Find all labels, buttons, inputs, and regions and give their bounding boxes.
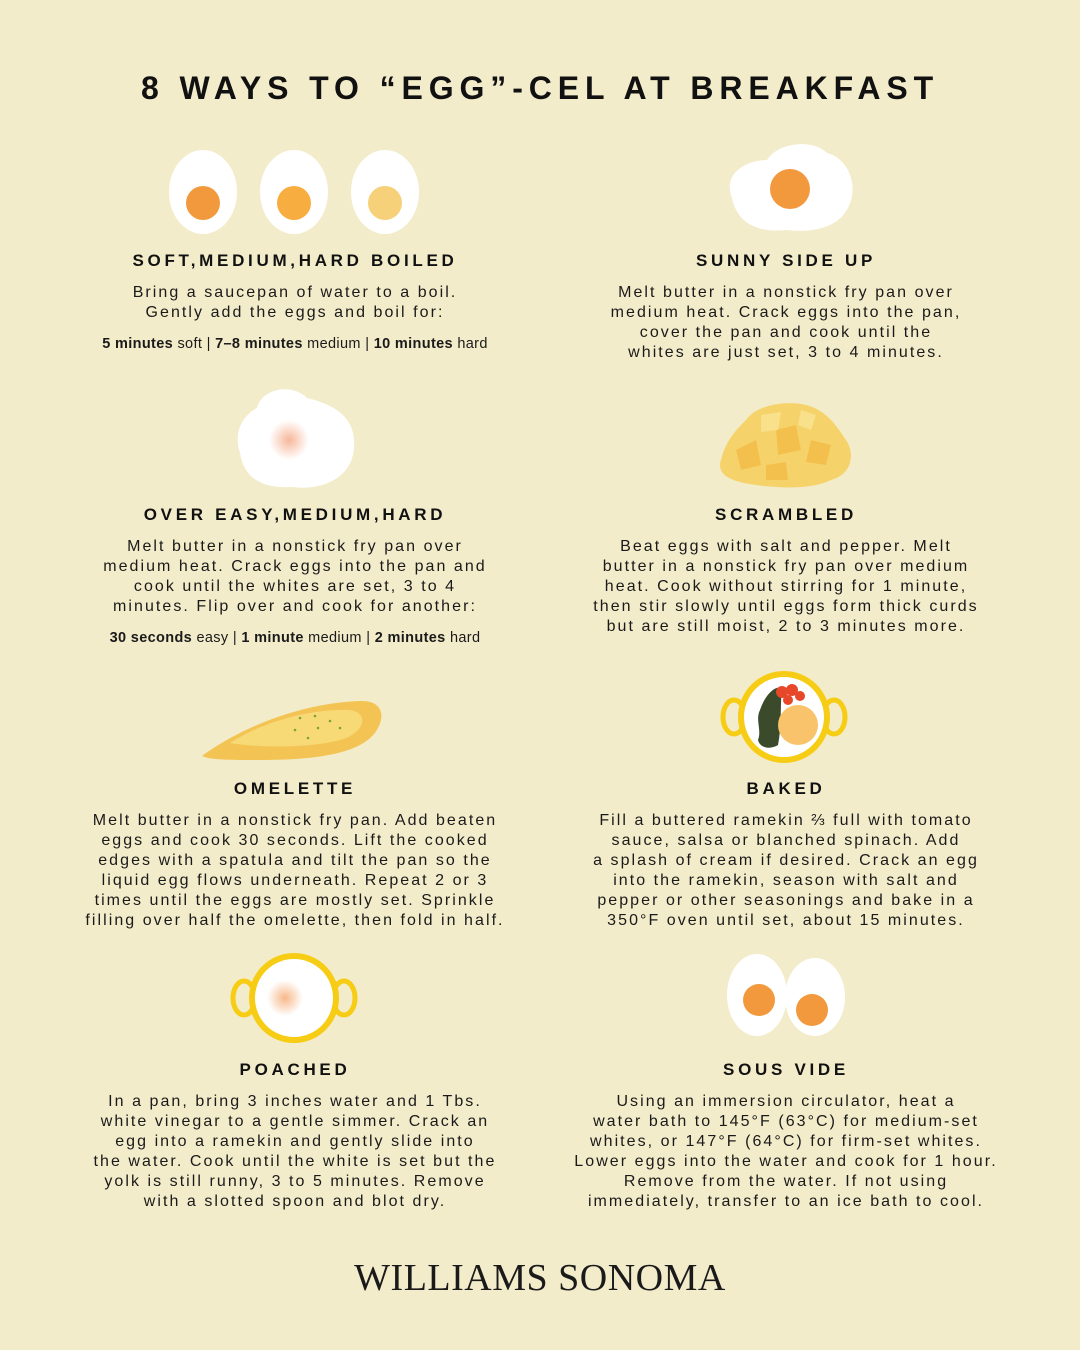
- text: over easy: [103, 538, 487, 615]
- heading: over easy: OVER EASY,MEDIUM,HARD: [144, 505, 446, 524]
- text: omelette: eggs and cook 30 seconds. Lift the cooked: [101, 832, 489, 849]
- times: over easy: 30 seconds easy | 1 minute medium | 2 minutes hard: [110, 630, 480, 646]
- text: poached: white vinegar to a gentle simmer. Crack an: [101, 1113, 489, 1130]
- text: scrambled: then stir slowly until eggs form thick curds: [593, 598, 979, 615]
- text: scrambled: Beat eggs with salt and pepper. Melt: [620, 538, 952, 555]
- text: sunny side up: [611, 284, 961, 361]
- text: sous vide: [574, 1093, 998, 1210]
- heading: sous vide: SOUS VIDE: [723, 1060, 849, 1079]
- title: 8 WAYS TO “EGG”-CEL AT BREAKFAST: [141, 70, 939, 106]
- text: sunny side up: medium heat. Crack eggs into the pan,: [611, 304, 961, 321]
- icon: poached: [230, 953, 358, 1043]
- text: over easy: minutes. Flip over and cook for another:: [113, 598, 477, 615]
- text: scrambled: but are still moist, 2 to 3 minutes more.: [607, 618, 965, 635]
- text: poached: In a pan, bring 3 inches water and 1 Tbs.: [108, 1093, 482, 1110]
- text: boiled: Gently add the eggs and boil for:: [146, 304, 444, 321]
- text: baked: Fill a buttered ramekin ⅔ full with tomato: [599, 812, 973, 829]
- text: sous vide: water bath to 145°F (63°C) for medium-set: [593, 1113, 979, 1130]
- text: poached: [94, 1093, 496, 1210]
- text: over easy: cook until the whites are set, 3 to 4: [134, 578, 456, 595]
- icon: sous vide eggs: [727, 954, 845, 1036]
- heading: sunny side up: SUNNY SIDE UP: [696, 251, 876, 270]
- text: sous vide: immediately, transfer to an ice bath to cool.: [588, 1193, 984, 1210]
- text: baked: into the ramekin, season with salt and: [613, 872, 959, 889]
- text: over easy: Melt butter in a nonstick fry pan over: [127, 538, 463, 555]
- text: sous vide: Remove from the water. If not using: [624, 1173, 948, 1190]
- text: over easy: medium heat. Crack eggs into the pan and: [103, 558, 487, 575]
- text: omelette: edges with a spatula and tilt the pan so the: [98, 852, 492, 869]
- heading: scrambled: SCRAMBLED: [715, 505, 857, 524]
- text: poached: the water. Cook until the white is set but the: [94, 1153, 496, 1170]
- heading: baked: BAKED: [747, 779, 825, 798]
- text: baked: 350°F oven until set, about 15 minutes.: [607, 912, 965, 929]
- text: sunny side up: Melt butter in a nonstick fry pan over: [618, 284, 954, 301]
- text: sous vide: Lower eggs into the water and cook for 1 hour.: [574, 1153, 998, 1170]
- text: omelette: Melt butter in a nonstick fry pan. Add beaten: [93, 812, 497, 829]
- text: scrambled: [593, 538, 979, 635]
- text: omelette: liquid egg flows underneath. Repeat 2 or 3: [102, 872, 488, 889]
- icon: over easy: [238, 389, 354, 488]
- icon: three boiled eggs: [169, 150, 419, 234]
- text: baked: [593, 812, 979, 929]
- text: sous vide: whites, or 147°F (64°C) for firm-set whites.: [590, 1133, 982, 1150]
- text: omelette: [85, 812, 505, 929]
- heading: poached: POACHED: [240, 1060, 350, 1079]
- heading: omelette: OMELETTE: [234, 779, 356, 798]
- text: baked: a splash of cream if desired. Crack an egg: [593, 852, 979, 869]
- text: omelette: times until the eggs are mostly set. Sprinkle: [95, 892, 495, 909]
- text: boiled: [133, 284, 457, 321]
- logo: WILLIAMS SONOMA: [354, 1257, 726, 1299]
- text: sunny side up: whites are just set, 3 to 4 minutes.: [628, 344, 944, 361]
- icon: scrambled: [720, 403, 851, 488]
- text: boiled: Bring a saucepan of water to a boil.: [133, 284, 457, 301]
- text: poached: egg into a ramekin and gently slide into: [115, 1133, 475, 1150]
- text: baked: pepper or other seasonings and bake in a: [597, 892, 975, 909]
- text: poached: yolk is still runny, 3 to 5 minutes. Remove: [104, 1173, 486, 1190]
- text: baked: sauce, salsa or blanched spinach. Add: [612, 832, 960, 849]
- text: scrambled: butter in a nonstick fry pan over medium: [603, 558, 969, 575]
- icon: sunny side up: [730, 144, 853, 231]
- text: scrambled: heat. Cook without stirring for 1 minute,: [605, 578, 967, 595]
- text: sous vide: Using an immersion circulator, heat a: [616, 1093, 956, 1110]
- text: poached: with a slotted spoon and blot dry.: [144, 1193, 446, 1210]
- text: omelette: filling over half the omelette, then fold in half.: [85, 912, 505, 929]
- icon: baked ramekin: [720, 671, 848, 763]
- text: sunny side up: cover the pan and cook until the: [640, 324, 932, 341]
- times: boiled: 5 minutes soft | 7–8 minutes medium | 10 minutes hard: [102, 336, 488, 352]
- heading: boiled: SOFT,MEDIUM,HARD BOILED: [132, 251, 457, 270]
- icon: omelette: [202, 701, 382, 760]
